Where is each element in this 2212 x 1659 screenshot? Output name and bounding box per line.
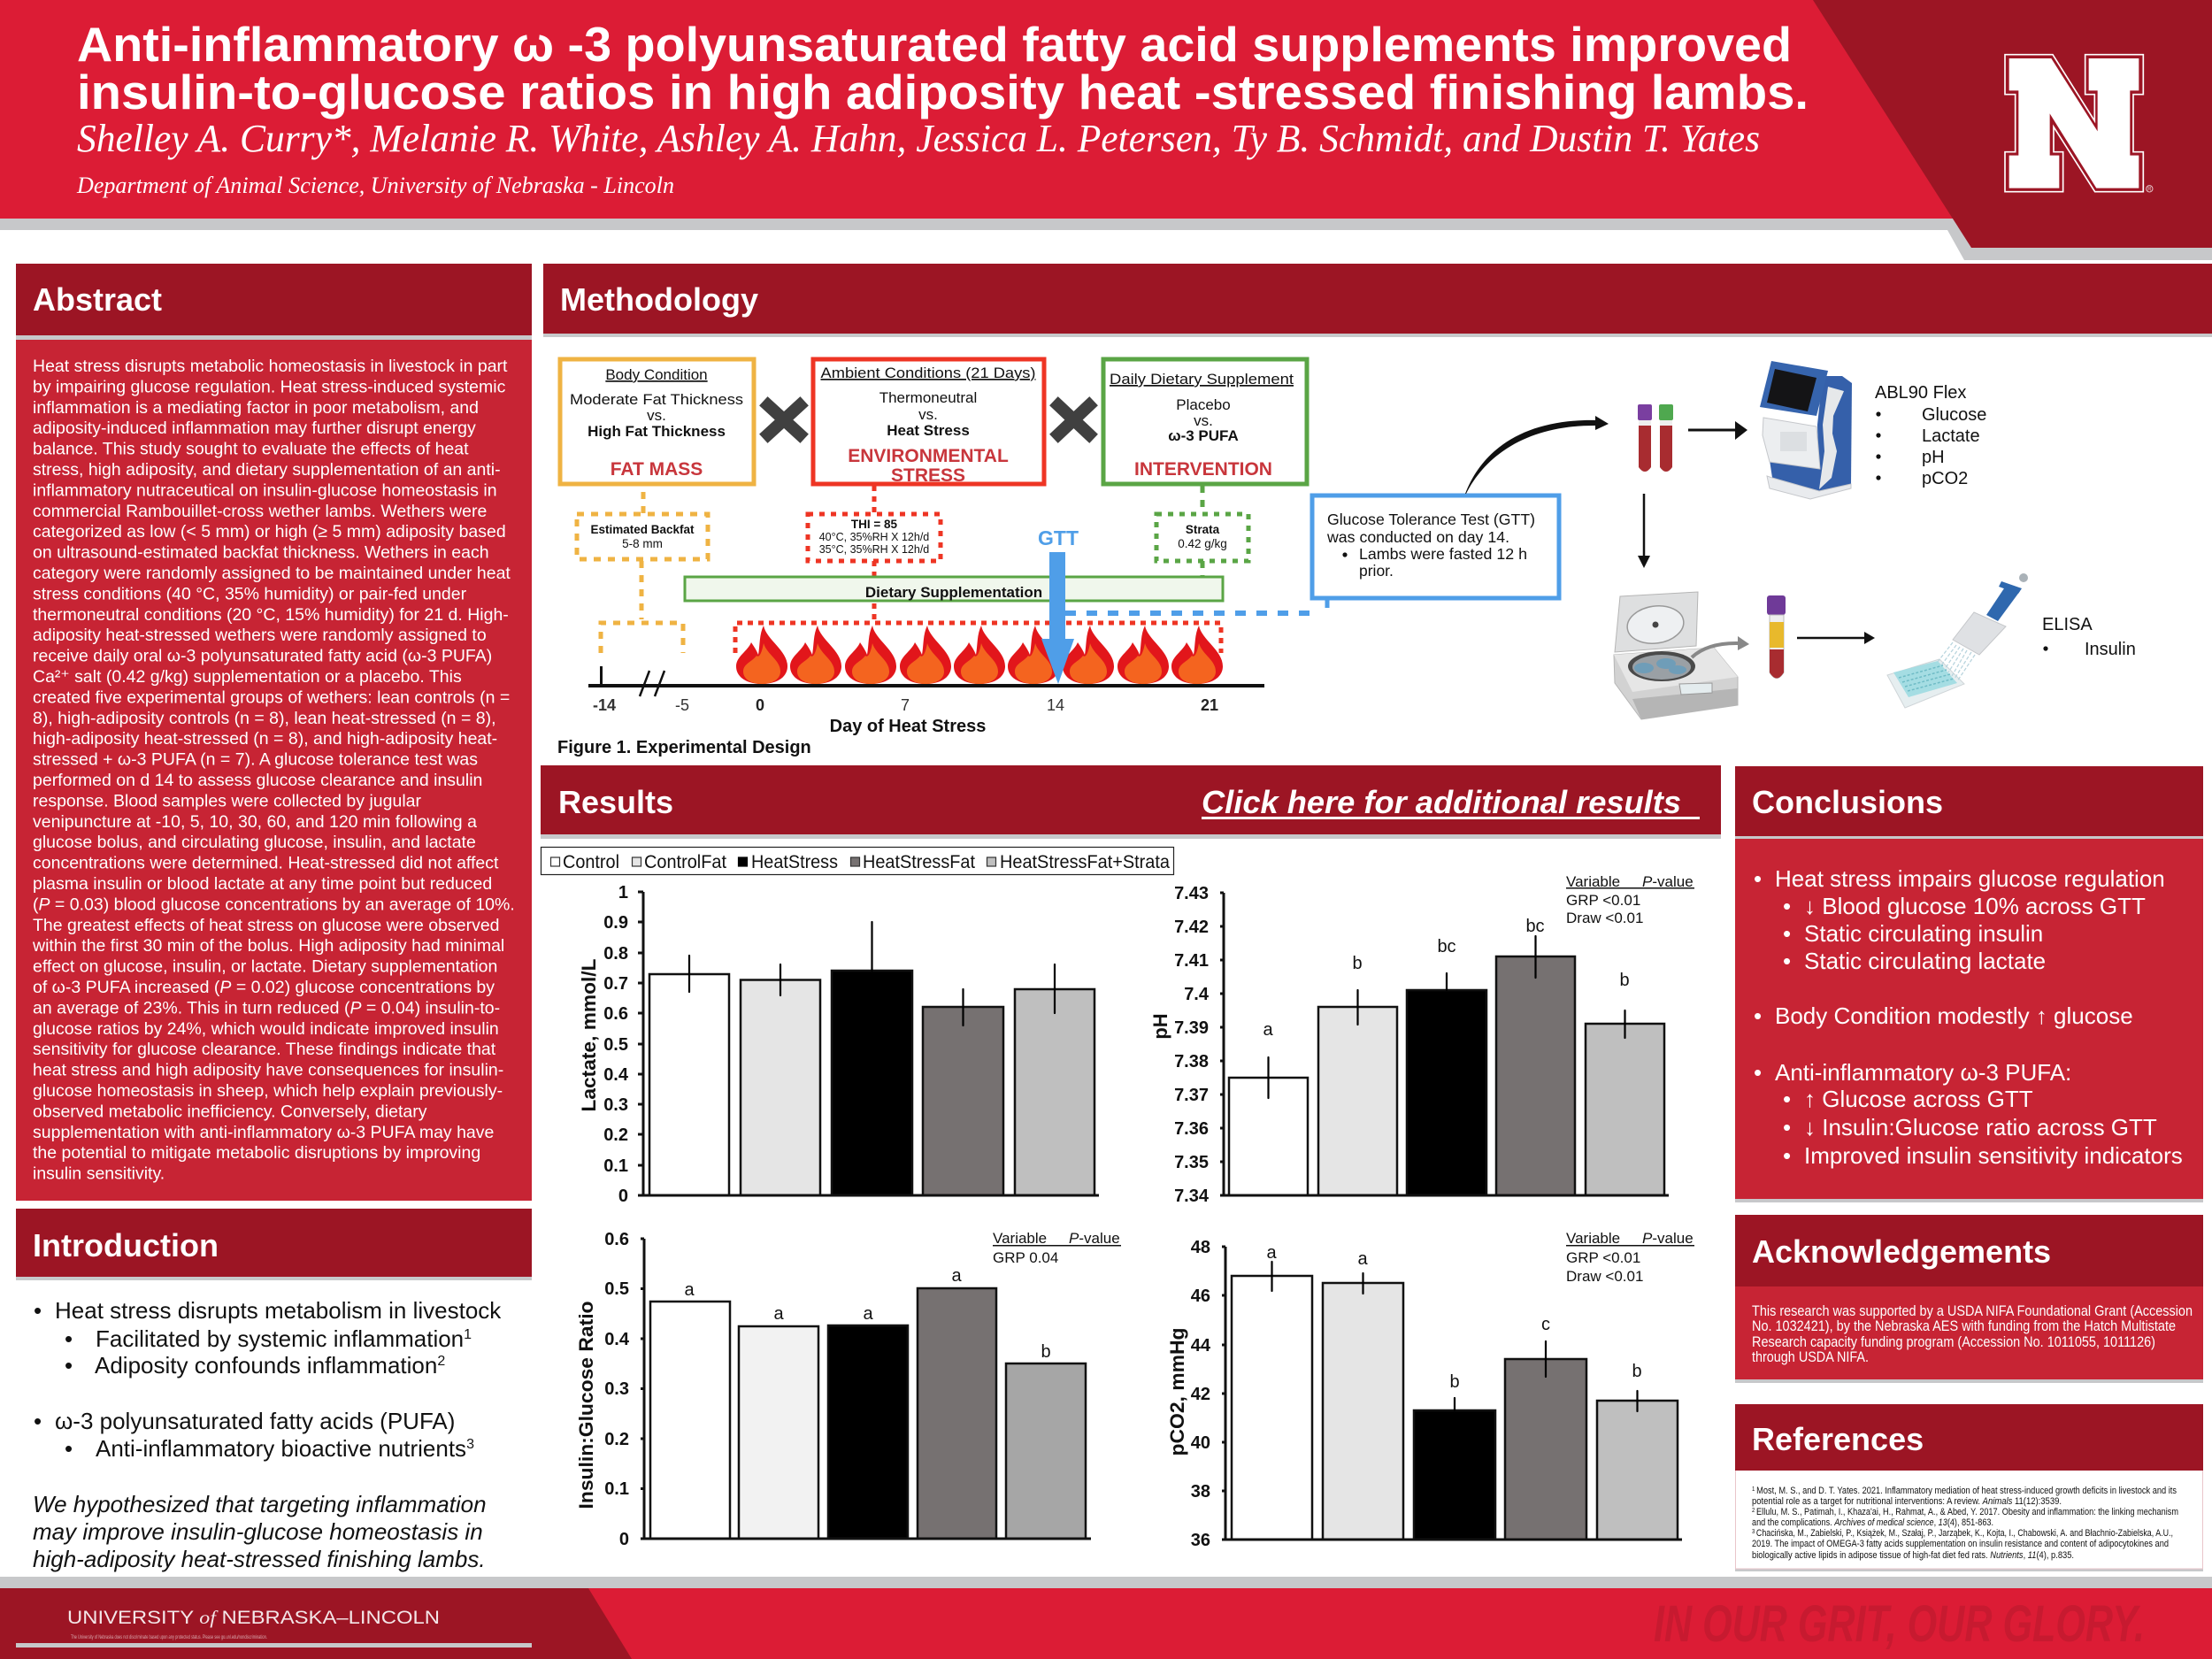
bar chart: lactate: 0.7 <box>603 974 628 994</box>
analyzer list <box>1875 383 1986 488</box>
references text: 3 <box>1752 1529 1756 1535</box>
bar: dietary supplementation <box>685 577 1223 601</box>
conclusions bullets: Heat stress impairs glucose regulation <box>1775 865 2165 892</box>
icon: flames <box>736 626 1223 684</box>
ELISA list <box>2042 615 2136 659</box>
box: estimated backfat: 5-8 mm <box>622 537 663 550</box>
panel: conclusions <box>1735 766 2203 1202</box>
introduction bullets: 1 <box>464 1327 472 1342</box>
abstract text: Heat stress disrupts metabolic homeostasis in livestock in part <box>33 357 508 376</box>
p-value note: Variable <box>1566 1230 1620 1247</box>
bar chart: pH: 7.34 <box>1174 1187 1210 1206</box>
footer small print: The University of Nebraska does not discriminate based upon any protected status. Please see go.unl.edu/nondiscrimination. <box>71 1635 267 1640</box>
timeline: -14 <box>593 696 616 714</box>
abstract text: concentrations were determined. Heat-stressed did not affect <box>33 854 499 873</box>
bar chart: insulin glucose ratio: 0.3 <box>604 1379 629 1399</box>
bar chart: pCO2 <box>1166 1230 1694 1550</box>
acknowledgements text: through USDA NIFA. <box>1752 1348 1869 1365</box>
abstract text: adiposity-induced inflammation may further disrupt energy <box>33 419 476 438</box>
box: ambient conditions: Thermoneutral <box>879 389 977 406</box>
bar chart: insulin glucose ratio: b <box>1041 1342 1051 1362</box>
conclusions bullets: • <box>1783 1086 1791 1112</box>
caption: Figure 1. Experimental Design <box>557 738 811 757</box>
p-value note: P-value <box>1642 873 1694 890</box>
abstract text: category were randomly assigned to be maintained under heat <box>33 564 511 583</box>
p-value note: Draw <0.01 <box>1566 910 1643 926</box>
references text: and the complications. Archives of medical science, 13(4), 851-863. <box>1752 1517 1993 1528</box>
conclusions bullets: Static circulating lactate <box>1804 948 2046 974</box>
bar chart: insulin glucose ratio: a <box>951 1266 962 1286</box>
timeline: 0 <box>756 696 764 714</box>
introduction bullets: • <box>34 1297 42 1324</box>
analyzer list: ABL90 Flex <box>1875 383 1966 403</box>
box: ambient conditions: vs. <box>918 406 938 423</box>
bar chart: pH: 7.41 <box>1174 951 1209 971</box>
abstract text: stressed + ω-3 PUFA (n = 7). A glucose tolerance test was <box>33 750 478 770</box>
legend <box>541 848 1173 874</box>
heading: references: References <box>1752 1421 1924 1457</box>
bar chart: lactate: 0.6 <box>603 1004 628 1024</box>
box: strata <box>1156 514 1248 561</box>
box: body condition: FAT MASS <box>611 459 703 480</box>
heading: abstract: Abstract <box>33 281 162 318</box>
abstract text: within the first 30 min of the bolus. High adiposity had minimal <box>32 936 504 956</box>
abstract text: of ω-3 PUFA increased (P = 0.02) glucose concentrations by <box>33 978 495 997</box>
panel: introduction <box>16 1209 532 1572</box>
abstract text: thermoneutral conditions (20 °C, 15% humidity) for 21 d. High- <box>33 605 509 625</box>
box: strata: 0.42 g/kg <box>1178 537 1227 550</box>
conclusions bullets: ↓ Blood glucose 10% across GTT <box>1804 893 2146 919</box>
abstract text: 8), high-adiposity controls (n = 8), lean heat-stressed (n = 8), <box>33 709 496 728</box>
abstract text: stress conditions (40 °C, 35% humidity) or pair-fed under <box>33 584 467 603</box>
bar chart: pH: 7.39 <box>1174 1018 1209 1038</box>
abstract text: inflammation is a mediating factor in poor metabolism, and <box>33 398 479 418</box>
box: body condition: Body Condition <box>605 366 708 383</box>
conclusions bullets: • <box>1754 1002 1762 1029</box>
p-value note <box>1566 873 1694 926</box>
abstract text: an average of 23%. This in turn reduced (P = 0.04) insulin-to- <box>33 998 500 1018</box>
abstract text: created five experimental groups of wethers: lean controls (n = <box>33 687 510 707</box>
abstract text: Ca²⁺ salt (0.42 g/kg) supplementation or a placebo. This <box>33 667 462 687</box>
abstract text: balance. This study sought to evaluate the effects of heat <box>33 440 469 459</box>
abstract text: The greatest effects of heat stress on glucose were observed <box>33 916 500 935</box>
callout: GTT box: Glucose Tolerance Test (GTT) <box>1327 511 1535 528</box>
bar: dietary supplementation: Dietary Supplementation <box>865 584 1042 601</box>
introduction bullets: Heat stress disrupts metabolism in livestock <box>55 1297 502 1324</box>
p-value note: Variable <box>993 1230 1047 1247</box>
bar chart: insulin glucose ratio <box>575 1230 1121 1549</box>
box: ambient conditions: STRESS <box>891 465 965 486</box>
abstract text: performed on d 14 to assess glucose clearance and insulin <box>33 771 482 790</box>
abstract text: inflammatory nutraceutical on insulin-glucose homeostasis in <box>33 480 497 500</box>
conclusions bullets: Body Condition modestly ↑ glucose <box>1775 1002 2133 1029</box>
legend: HeatStressFat <box>863 852 975 872</box>
abstract text: stress, high adiposity, and dietary supplementation of an anti- <box>33 460 501 480</box>
bar chart: lactate: 0.5 <box>603 1035 628 1055</box>
conclusions bullets: • <box>1783 893 1791 919</box>
bar chart: insulin glucose ratio: 0.4 <box>604 1330 630 1349</box>
bar chart: pH: b <box>1619 971 1630 990</box>
callout: GTT box: was conducted on day 14. <box>1326 528 1509 546</box>
panel: methodology heading <box>543 264 2212 337</box>
hypothesis text: may improve insulin-glucose homeostasis in <box>33 1518 483 1545</box>
arrow: to ELISA <box>1797 632 1875 644</box>
analyzer list: pCO2 <box>1922 469 1968 488</box>
references text: biologically active lipids in adipose tissue of high-fat diet fed rats. Nutrients, 11(4), p.835. <box>1752 1550 2074 1561</box>
legend: HeatStressFat+Strata <box>1000 852 1170 872</box>
abstract text: supplementation with anti-inflammatory ω-3 PUFA may have <box>33 1123 494 1142</box>
abstract text: commercial Rambouillet-cross wether lambs. Wethers were <box>33 502 487 521</box>
bar chart: pCO2: c <box>1541 1315 1550 1334</box>
title: insulin-to-glucose ratios in high adiposity heat -stressed finishing lambs. <box>77 65 1809 119</box>
panel: methodology heading: Methodology <box>560 281 758 318</box>
abstract text: adiposity heat-stressed wethers were randomly assigned to <box>33 626 487 645</box>
abstract text: the potential to mitigate metabolic disruptions by improving <box>33 1143 480 1163</box>
bar chart: pH: 7.38 <box>1174 1052 1209 1071</box>
callout: GTT box: prior. <box>1359 562 1394 580</box>
abstract text: insulin sensitivity. <box>33 1164 165 1184</box>
bar chart: pH: a <box>1263 1020 1273 1040</box>
bar chart: insulin glucose ratio: 0 <box>619 1530 629 1549</box>
box: dietary supplement: Placebo <box>1176 396 1231 413</box>
box: dietary supplement <box>1103 359 1307 484</box>
references text: potential role as a target for nutritional interventions: A review. Animals 11(12):3539. <box>1752 1496 2062 1507</box>
abstract text: observed metabolic inefficiency. Conversely, dietary <box>33 1102 427 1121</box>
panel: results heading: Results <box>558 784 673 820</box>
conclusions bullets: ↓ Insulin:Glucose ratio across GTT <box>1804 1114 2157 1141</box>
introduction bullets: 2 <box>437 1354 445 1369</box>
bar chart: pH: 7.35 <box>1174 1153 1209 1172</box>
acknowledgements text <box>1752 1302 2193 1365</box>
bar chart: lactate: Lactate, mmol/L <box>578 959 600 1111</box>
bar chart: pCO2: pCO2, mmHg <box>1166 1327 1188 1456</box>
bar chart: lactate: 0.3 <box>603 1095 628 1115</box>
dashed connectors <box>601 486 1327 653</box>
conclusions bullets: • <box>1783 1114 1791 1141</box>
legend: ControlFat <box>644 852 726 872</box>
introduction bullets <box>34 1297 502 1462</box>
conclusions bullets: • <box>1783 920 1791 947</box>
abstract text: glucose ratios by 24%, which would indicate improved insulin <box>33 1019 499 1039</box>
abstract text: high-adiposity heat-stressed (n = 8), and high-adiposity heat- <box>33 729 497 749</box>
bar chart: pCO2: 42 <box>1191 1385 1210 1404</box>
bar chart: lactate: 0.8 <box>603 944 628 964</box>
title <box>77 17 1809 119</box>
introduction bullets: • <box>65 1435 73 1462</box>
introduction bullets: • <box>65 1352 73 1379</box>
icon: Nebraska N logo: R <box>2147 188 2152 193</box>
bar chart: insulin glucose ratio: a <box>863 1304 873 1324</box>
icon: blood tubes <box>1638 404 1673 472</box>
bar chart: insulin glucose ratio: a <box>773 1304 784 1324</box>
p-value note <box>1566 1230 1694 1285</box>
bar chart: pCO2: 40 <box>1191 1433 1210 1453</box>
box: body condition <box>560 359 754 484</box>
abstract text: venipuncture at -10, 5, 10, 30, 60, and 120 min following a <box>33 812 477 832</box>
introduction bullets: Facilitated by systemic inflammation <box>96 1325 464 1352</box>
bar chart: pCO2: b <box>1449 1372 1460 1392</box>
icon: multiply <box>1058 405 1089 434</box>
bar chart: lactate: 1 <box>618 883 628 902</box>
introduction bullets: Anti-inflammatory bioactive nutrients <box>96 1435 466 1462</box>
box: body condition: vs. <box>647 407 666 424</box>
analyzer list: Lactate <box>1922 426 1980 446</box>
abstract text: heat stress and high adiposity have consequences for insulin- <box>33 1061 503 1080</box>
bar chart: lactate: 0.1 <box>603 1156 628 1176</box>
bar chart: pH: 7.43 <box>1174 884 1209 903</box>
abstract text: by impairing glucose regulation. Heat stress-induced systemic <box>33 377 506 396</box>
references text: 2 <box>1752 1508 1756 1514</box>
abstract text: (P = 0.03) blood glucose concentrations by an average of 10%. <box>33 895 515 914</box>
arrow: to analyzer <box>1688 421 1747 440</box>
abstract text: response. Blood samples were collected by jugular <box>33 791 421 810</box>
conclusions bullets: • <box>1754 1059 1762 1086</box>
hypothesis text <box>33 1491 487 1572</box>
conclusions bullets: • <box>1783 948 1791 974</box>
bar chart: insulin glucose ratio: Insulin:Glucose Ratio <box>575 1302 597 1509</box>
abstract text: receive daily oral ω-3 polyunsaturated fatty acid (ω-3 PUFA) <box>33 647 492 666</box>
timeline: 21 <box>1201 696 1218 714</box>
bar chart: pH: pH <box>1149 1013 1171 1040</box>
timeline: Day of Heat Stress <box>830 717 986 736</box>
legend: Control <box>563 852 619 872</box>
ELISA list: ELISA <box>2042 615 2093 634</box>
conclusions bullets: Anti-inflammatory ω-3 PUFA: <box>1775 1059 2071 1086</box>
conclusions bullets: • <box>1783 1142 1791 1169</box>
heading: conclusions: Conclusions <box>1752 784 1943 820</box>
timeline: -5 <box>675 696 689 714</box>
title: Anti-inflammatory ω -3 polyunsaturated fatty acid supplements improved <box>77 17 1792 72</box>
bar chart: pH: 7.37 <box>1174 1086 1209 1105</box>
conclusions bullets <box>1754 865 2183 1169</box>
ELISA list: Insulin <box>2085 640 2136 659</box>
box: strata: Strata <box>1186 523 1220 536</box>
arrow: GTT <box>1038 526 1079 684</box>
timeline: 14 <box>1047 696 1064 714</box>
affiliation: Department of Animal Science, University of Nebraska - Lincoln <box>76 173 674 198</box>
bar chart: pH: 7.36 <box>1174 1119 1209 1139</box>
box: body condition: High Fat Thickness <box>588 423 726 440</box>
box: dietary supplement: Daily Dietary Supplement <box>1110 371 1294 388</box>
bar chart: lactate: 0.4 <box>603 1065 629 1085</box>
bar chart: pCO2: 36 <box>1191 1531 1210 1550</box>
introduction bullets: • <box>65 1325 73 1352</box>
bar chart: pCO2: b <box>1632 1362 1642 1381</box>
conclusions bullets: Static circulating insulin <box>1804 920 2043 947</box>
panel: results heading <box>541 765 1721 839</box>
p-value note: GRP <0.01 <box>1566 892 1640 909</box>
conclusions bullets: • <box>1754 865 1762 892</box>
introduction bullets: 3 <box>466 1437 474 1452</box>
icon: separated tube <box>1767 595 1786 678</box>
icon: ABL90 analyzer <box>1760 361 1852 499</box>
footer wordmark: UNIVERSITY of NEBRASKA–LINCOLN <box>67 1607 440 1628</box>
bar chart: pCO2: 44 <box>1191 1336 1211 1356</box>
legend: HeatStress <box>751 852 838 872</box>
abstract text: glucose homeostasis in sheep, which help explain previously- <box>33 1081 503 1101</box>
timeline: 7 <box>901 696 910 714</box>
box: ambient conditions: ENVIRONMENTAL <box>848 446 1009 466</box>
references text: 1 <box>1752 1486 1756 1493</box>
box: ambient conditions <box>813 359 1044 486</box>
bar chart: pCO2: 48 <box>1191 1238 1210 1257</box>
panel: references <box>1735 1404 2203 1571</box>
bar chart: lactate: 0.9 <box>603 913 628 933</box>
box: THI: THI = 85 <box>851 518 898 531</box>
box: dietary supplement: ω-3 PUFA <box>1168 427 1239 444</box>
p-value note: Draw <0.01 <box>1566 1268 1643 1285</box>
introduction bullets: • <box>34 1408 42 1434</box>
abstract text: sensitivity for glucose clearance. These findings indicate that <box>33 1040 496 1059</box>
p-value note: P-value <box>1642 1230 1694 1247</box>
abstract text <box>32 357 515 1184</box>
box: estimated backfat: Estimated Backfat <box>590 523 695 536</box>
box: ambient conditions: Heat Stress <box>887 422 970 439</box>
bar chart: insulin glucose ratio: 0.1 <box>604 1479 629 1499</box>
authors: Shelley A. Curry*, Melanie R. White, Ashley A. Hahn, Jessica L. Petersen, Ty B. Schmidt, and Dustin T. Yates <box>77 117 1760 160</box>
p-value note: Variable <box>1566 873 1620 890</box>
arrow: to centrifuge <box>1638 494 1650 568</box>
box: THI: 40°C, 35%RH X 12h/d <box>819 531 929 543</box>
analyzer list: Glucose <box>1922 405 1986 425</box>
header banner <box>0 0 2212 260</box>
box: ambient conditions: Ambient Conditions (21 Days) <box>821 365 1035 381</box>
abstract text: effect on glucose, insulin, or lactate. Dietary supplementation <box>33 957 497 977</box>
heading: introduction: Introduction <box>33 1227 219 1263</box>
p-value note: GRP <0.01 <box>1566 1249 1640 1266</box>
p-value note <box>993 1230 1121 1266</box>
arrow: curved to tubes <box>1465 416 1609 494</box>
bar chart: pH: b <box>1352 954 1363 973</box>
introduction bullets: ω-3 polyunsaturated fatty acids (PUFA) <box>55 1408 455 1434</box>
analyzer list: pH <box>1922 448 1945 467</box>
icon: multiply <box>768 405 800 434</box>
timeline <box>588 666 1264 736</box>
bar chart: lactate: 0.2 <box>603 1125 628 1145</box>
box: dietary supplement: INTERVENTION <box>1134 459 1272 480</box>
bar chart: pH: bc <box>1437 937 1456 956</box>
p-value note: P-value <box>1069 1230 1120 1247</box>
link: additional results: Click here for additional results <box>1202 784 1681 820</box>
bar chart: pCO2: a <box>1266 1243 1277 1263</box>
bar chart: pCO2: a <box>1357 1249 1368 1269</box>
callout: GTT box <box>1312 495 1559 598</box>
bar chart: lactate <box>578 883 1099 1206</box>
bar chart: pCO2: 38 <box>1191 1482 1210 1502</box>
abstract text: plasma insulin or blood lactate at any time point but reduced <box>33 874 492 894</box>
box: THI: 35°C, 35%RH X 12h/d <box>819 543 929 556</box>
panel: abstract <box>16 264 532 1201</box>
references text <box>1752 1486 2178 1561</box>
abstract text: on ultrasound-estimated backfat thickness. Wethers in each <box>33 543 489 563</box>
figure: experimental design <box>557 359 2136 757</box>
acknowledgements text: Research capacity funding program (Accession No. 1011055, 1011126) <box>1752 1333 2155 1350</box>
icon: Nebraska N logo <box>2005 55 2153 193</box>
bar chart: insulin glucose ratio: 0.5 <box>604 1279 629 1299</box>
bar chart: insulin glucose ratio: 0.6 <box>604 1230 629 1249</box>
abstract text: categorized as low (< 5 mm) or high (≥ 5 mm) adiposity based <box>33 522 506 541</box>
bar chart: pH: 7.42 <box>1174 918 1209 937</box>
bar chart: pH: 7.4 <box>1184 985 1210 1004</box>
conclusions bullets: ↑ Glucose across GTT <box>1804 1086 2033 1112</box>
box: THI <box>808 514 941 561</box>
bar chart: insulin glucose ratio: a <box>684 1280 695 1300</box>
bar chart: pH: bc <box>1525 917 1545 936</box>
conclusions bullets: Improved insulin sensitivity indicators <box>1804 1142 2183 1169</box>
icon: centrifuge <box>1614 592 1749 719</box>
arrow: GTT: GTT <box>1038 526 1079 549</box>
bar chart: insulin glucose ratio: 0.2 <box>604 1430 629 1449</box>
abstract text: glucose bolus, and circulating glucose, insulin, and lactate <box>33 833 476 852</box>
hypothesis text: high-adiposity heat-stressed finishing lambs. <box>33 1546 486 1572</box>
heading: acknowledgements: Acknowledgements <box>1752 1233 2051 1270</box>
panel: acknowledgements <box>1735 1215 2203 1383</box>
callout: GTT box: Lambs were fasted 12 h <box>1359 545 1527 563</box>
hypothesis text: We hypothesized that targeting inflammation <box>33 1491 487 1517</box>
bar chart: pCO2: 46 <box>1191 1286 1210 1306</box>
bar chart: pH <box>1149 873 1694 1206</box>
box: dietary supplement: vs. <box>1194 412 1213 429</box>
box: estimated backfat <box>577 514 708 559</box>
box: body condition: Moderate Fat Thickness <box>570 391 743 408</box>
introduction bullets: Adiposity confounds inflammation <box>95 1352 437 1379</box>
bar chart: lactate: 0 <box>618 1187 628 1206</box>
icon: plate and pipette <box>1887 573 2028 708</box>
p-value note: GRP 0.04 <box>993 1249 1058 1266</box>
footer banner <box>0 1577 2212 1659</box>
